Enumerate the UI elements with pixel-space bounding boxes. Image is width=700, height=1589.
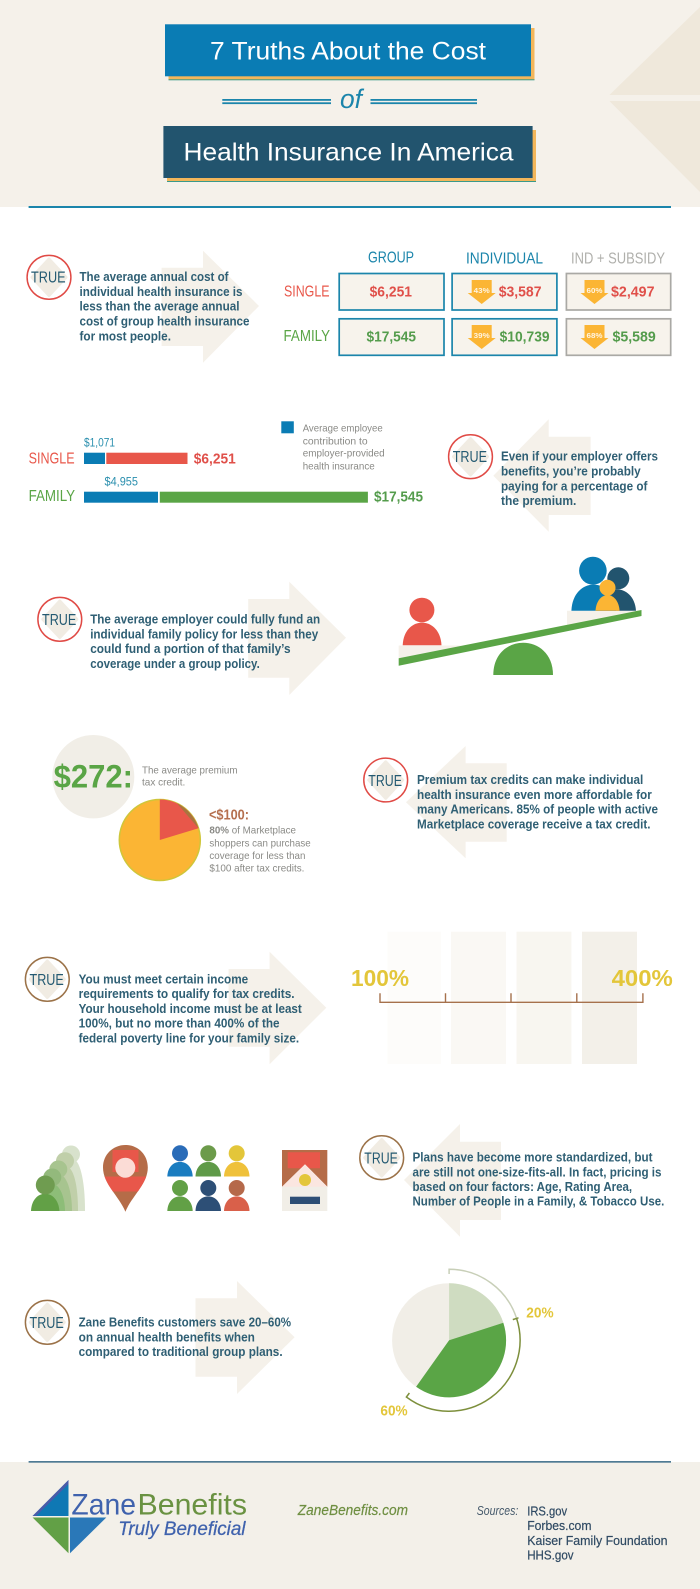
tax credit figures: <$100:: [209, 807, 249, 823]
true badge: TRUE: [453, 449, 487, 466]
logo: Benefits: [138, 1488, 247, 1521]
truth 3 text: individual family policy for less than they: [90, 627, 318, 641]
truth 7 text: Zane Benefits customers save 20–60%: [79, 1315, 291, 1329]
poverty line scale: 400%: [612, 965, 673, 991]
truth 3 text: could fund a portion of that family’s: [90, 642, 291, 656]
truth 1 panel: [27, 250, 671, 363]
sources: HHS.gov: [527, 1548, 574, 1563]
seesaw illustration: [399, 557, 642, 675]
cost comparison table: GROUP: [368, 250, 414, 267]
arrow: left: [406, 746, 507, 858]
sources: Forbes.com: [527, 1518, 592, 1533]
tax credit figures: The average premium: [142, 764, 238, 776]
truth 2 text: the premium.: [501, 494, 576, 508]
icon: cigarette pack: [282, 1150, 327, 1211]
true badge: TRUE: [364, 1150, 398, 1167]
sources: Kaiser Family Foundation: [527, 1533, 668, 1548]
bar chart: employee contribution: $17,545: [374, 489, 423, 506]
truth 6 text: Number of People in a Family, & Tobacco Use.: [412, 1195, 664, 1209]
truth 6 text: [412, 1150, 664, 1209]
icon: people group: [167, 1145, 250, 1211]
cost comparison table: 68%: [586, 331, 603, 340]
bar chart: employee contribution: $1,071: [84, 438, 115, 450]
truth 5 panel: [25, 932, 673, 1064]
truth 5 text: Your household income must be at least: [79, 1002, 303, 1016]
true badge: [27, 255, 71, 299]
truth 5 text: [79, 972, 303, 1046]
arrow: right: [162, 251, 259, 363]
tax credit figures: $272:: [54, 759, 133, 795]
truth 6 text: Plans have become more standardized, but: [412, 1150, 653, 1164]
truth 7 panel: [25, 1269, 554, 1420]
truth 5 text: 100%, but no more than 400% of the: [79, 1017, 280, 1031]
sources: [477, 1503, 668, 1563]
logo: Zane: [71, 1488, 136, 1521]
tax credit figures: tax credit.: [142, 777, 185, 789]
truth 5 text: requirements to qualify for tax credits.: [79, 987, 295, 1001]
cost comparison table: $2,497: [611, 284, 654, 301]
title line 2: [163, 126, 536, 182]
arrow: left: [493, 419, 591, 532]
cost comparison table: $6,251: [370, 284, 412, 301]
truth 1 text: [80, 270, 250, 343]
cost comparison table: 39%: [474, 331, 490, 340]
truth 1 text: less than the average annual: [80, 300, 240, 314]
truth 1 text: for most people.: [80, 329, 171, 343]
sources: IRS.gov: [527, 1503, 568, 1518]
cost comparison table: [284, 250, 671, 355]
cost comparison table: SINGLE: [284, 284, 330, 301]
sources: Sources:: [477, 1504, 518, 1518]
bar chart: employee contribution: [29, 421, 423, 506]
bar chart: employee contribution: contribution to: [303, 435, 368, 447]
true badge: TRUE: [30, 1315, 64, 1332]
tax credit figures: $100 after tax credits.: [209, 863, 304, 875]
cost comparison table: IND + SUBSIDY: [571, 250, 665, 267]
title line 1: [165, 24, 534, 80]
cost comparison table: $10,739: [500, 328, 550, 345]
true badge: TRUE: [42, 612, 76, 629]
logo: Truly Beneficial: [118, 1519, 246, 1540]
true badge: [38, 597, 82, 641]
pie chart: savings: [380, 1269, 554, 1420]
truth 6 text: are still not one-size-fits-all. In fact, pricing is: [412, 1165, 662, 1179]
poverty line scale: [351, 932, 673, 1064]
truth 2 text: paying for a percentage of: [501, 479, 648, 493]
true badge: [25, 957, 69, 1001]
bar chart: employee contribution: Average employee: [303, 423, 383, 435]
truth 2 text: [501, 450, 658, 508]
cost comparison table: 43%: [474, 286, 490, 295]
icon: age: [31, 1146, 85, 1211]
pie chart: savings: 60%: [380, 1404, 408, 1420]
truth 4 text: Premium tax credits can make individual: [417, 773, 643, 787]
bar chart: employee contribution: health insurance: [303, 460, 375, 472]
true badge: [360, 1136, 404, 1180]
truth 3 text: The average employer could fully fund an: [90, 612, 320, 626]
true badge: [449, 435, 492, 479]
truth 2 text: Even if your employer offers: [501, 450, 658, 464]
bar chart: employee contribution: employer-provided: [303, 448, 385, 460]
bar chart: employee contribution: $4,955: [104, 476, 138, 488]
tax credit figures: [52, 735, 311, 880]
true badge: TRUE: [31, 270, 66, 287]
truth 2 panel: [29, 419, 658, 532]
bar chart: employee contribution: FAMILY: [29, 488, 75, 505]
tax credit figures: coverage for less than: [209, 850, 306, 862]
truth 4 text: [417, 773, 658, 832]
truth 5 text: federal poverty line for your family size.: [79, 1032, 299, 1046]
true badge: TRUE: [30, 972, 64, 989]
cost comparison table: $3,587: [499, 284, 542, 301]
footer panel: [0, 1461, 700, 1589]
logo: [33, 1480, 247, 1553]
true badge: TRUE: [368, 773, 402, 790]
true badge: [364, 758, 408, 802]
truth 3 text: coverage under a group policy.: [90, 657, 260, 671]
arrow: right: [229, 952, 326, 1064]
truth 4 text: Marketplace coverage receive a tax credit.: [417, 818, 650, 832]
pie chart: savings: 20%: [526, 1305, 554, 1321]
truth 7 text: compared to traditional group plans.: [79, 1345, 283, 1359]
truth 2 text: benefits, you’re probably: [501, 465, 641, 479]
true badge: [25, 1300, 69, 1344]
cost comparison table: $17,545: [366, 328, 416, 345]
header panel: [0, 0, 700, 208]
poverty line scale: 100%: [351, 965, 409, 991]
title line 2: Health Insurance In America: [184, 139, 514, 167]
arrow: right: [196, 1281, 295, 1394]
website: ZaneBenefits.com: [297, 1503, 408, 1519]
truth 7 text: on annual health benefits when: [79, 1330, 255, 1344]
truth 5 text: You must meet certain income: [79, 972, 248, 986]
cost comparison table: $5,589: [612, 328, 656, 345]
title connector: of: of: [340, 84, 364, 114]
truth 4 text: many Americans. 85% of people with active: [417, 803, 658, 817]
truth 1 text: cost of group health insurance: [80, 315, 250, 329]
truth 7 text: [79, 1315, 291, 1359]
bar chart: employee contribution: SINGLE: [29, 450, 75, 467]
truth 1 text: The average annual cost of: [80, 270, 229, 284]
bar chart: employee contribution: $6,251: [194, 450, 236, 467]
tax credit figures: 80% of Marketplace: [209, 824, 296, 836]
truth 6 text: based on four factors: Age, Rating Area,: [412, 1180, 632, 1194]
cost comparison table: FAMILY: [284, 328, 330, 345]
truth 4 text: health insurance even more affordable for: [417, 788, 652, 802]
arrow: right: [248, 582, 346, 695]
icon: map pin: [103, 1145, 148, 1212]
arrow: left: [404, 1124, 501, 1237]
truth 4 panel: [52, 735, 658, 880]
cost comparison table: 60%: [586, 286, 603, 295]
truth 1 text: individual health insurance is: [80, 285, 242, 299]
truth 6 panel: [31, 1124, 664, 1237]
tax credit figures: shoppers can purchase: [209, 838, 311, 850]
truth 3 text: [90, 612, 320, 671]
cost comparison table: INDIVIDUAL: [466, 250, 543, 267]
title line 1: 7 Truths About the Cost: [210, 37, 486, 65]
truth 3 panel: [38, 557, 641, 695]
